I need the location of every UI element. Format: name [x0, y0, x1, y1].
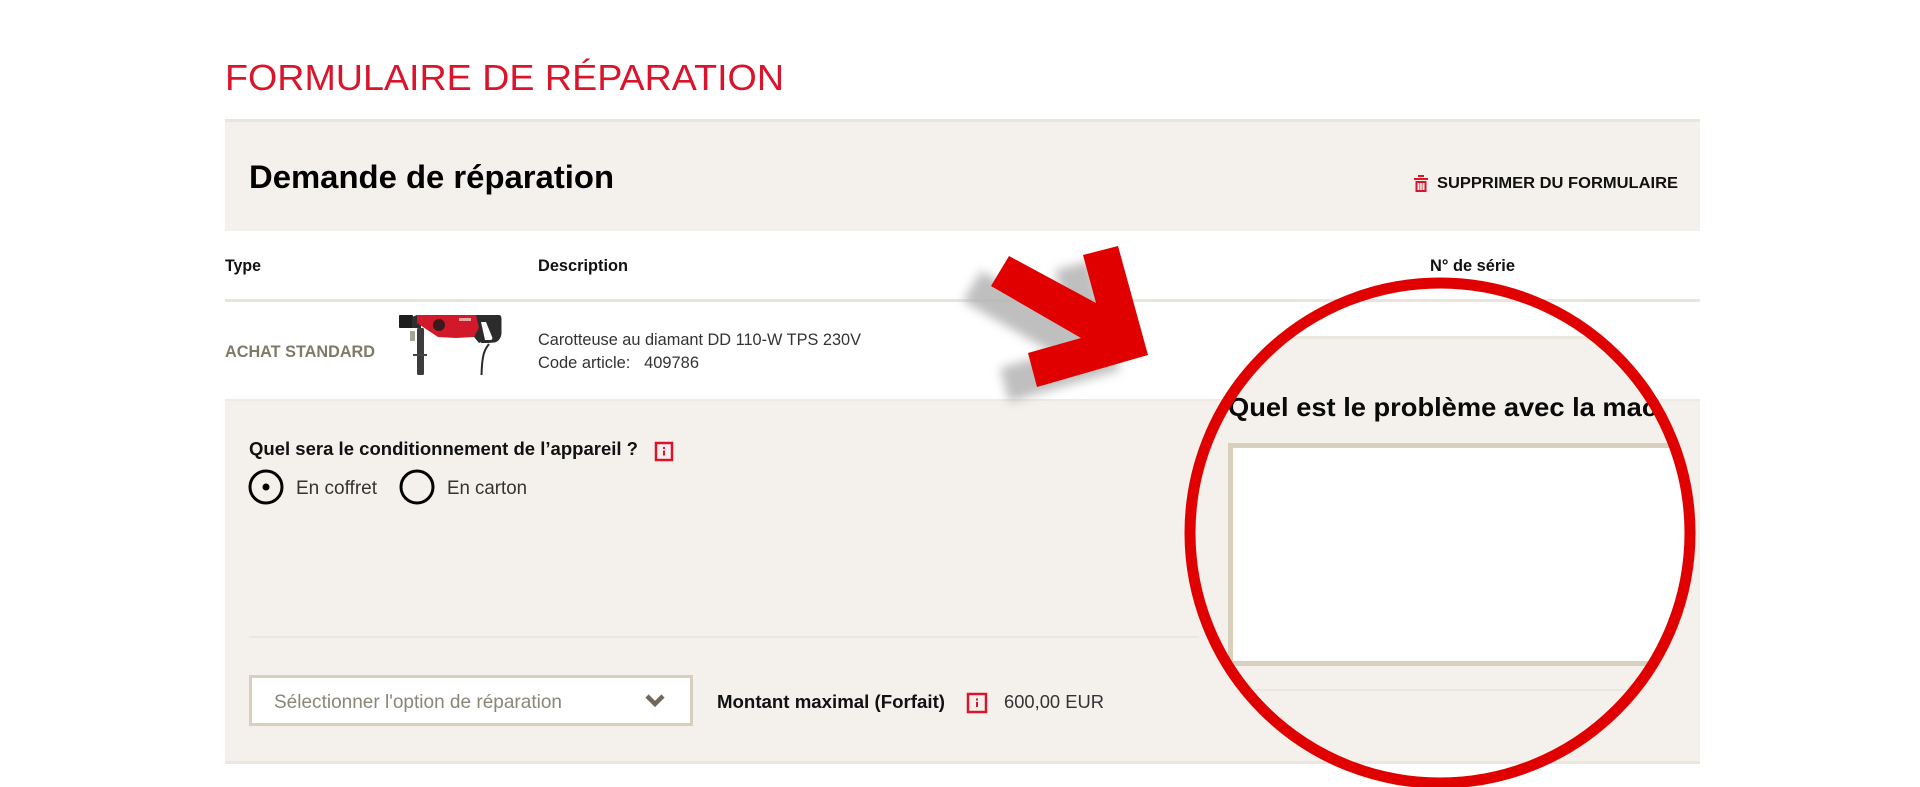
radio: en carton: En carton: [447, 477, 527, 499]
table header row: N° de série: [1430, 257, 1515, 275]
product description: [538, 330, 862, 372]
panel: repair options: [225, 399, 1700, 764]
dropdown: repair option: [250, 676, 692, 724]
table product row: [225, 315, 862, 375]
radio: en coffret: En coffret: [296, 477, 378, 499]
red circle: [1190, 283, 1690, 783]
product description: Code article: 409786: [538, 353, 699, 372]
callout: magnified problem field: [1180, 270, 1730, 787]
product description: Carotteuse au diamant DD 110-W TPS 230V: [538, 330, 862, 349]
link: supprimer du formulaire: SUPPRIMER DU FORMULAIRE: [1437, 175, 1678, 192]
icon: diamond drill: [399, 315, 502, 375]
radio: en coffret: [250, 471, 378, 503]
question: packaging: Quel sera le conditionnement de l’appareil ?: [249, 438, 638, 459]
icon: trash: [1414, 175, 1428, 192]
panel: header band: [225, 119, 1700, 231]
table header row: Description: [538, 257, 628, 275]
text: problem question: Quel est le problème avec la mac: [1228, 392, 1657, 422]
type label: ACHAT STANDARD: [225, 343, 375, 361]
arrow: [963, 246, 1148, 402]
table header row: Type: [225, 257, 261, 275]
dropdown: repair option: Sélectionner l'option de réparation: [274, 691, 562, 713]
table header row: [225, 257, 1515, 275]
icon: info: [968, 694, 986, 712]
heading: demande de réparation: Demande de réparation: [249, 159, 614, 195]
radio: en carton: [401, 471, 527, 503]
amount: 600,00 EUR: [1004, 691, 1104, 712]
icon: info: [656, 443, 672, 460]
textarea: [1230, 446, 1730, 664]
label: montant maximal: Montant maximal (Forfait): [717, 691, 945, 712]
title: FORMULAIRE DE RÉPARATION: [225, 57, 784, 98]
